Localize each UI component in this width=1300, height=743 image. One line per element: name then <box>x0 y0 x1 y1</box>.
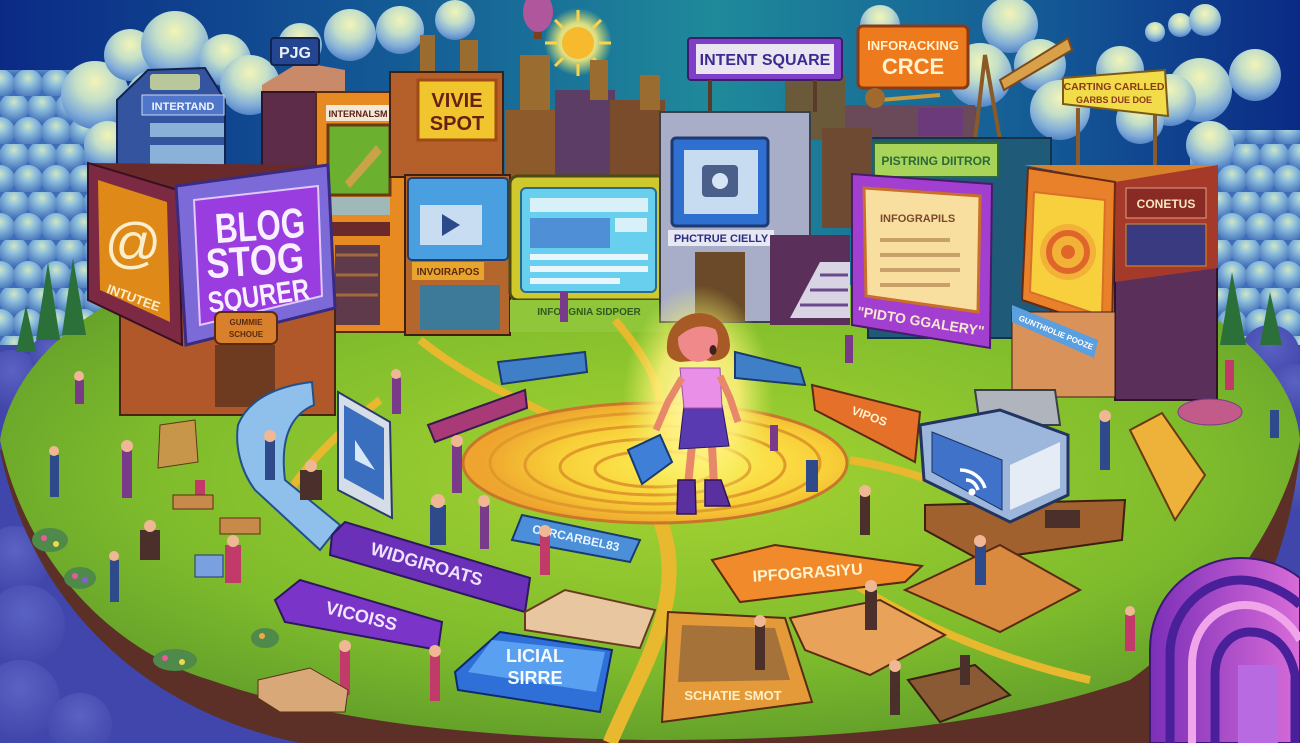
bench: Schatie Smot <box>662 612 812 722</box>
building: Conetus: GUNTHIOLIE POOZE <box>1017 314 1095 352</box>
bench: Licial Sirre <box>455 632 612 712</box>
storefront door: GUMMIE <box>230 318 263 327</box>
tag: PJG: PJG <box>279 45 311 62</box>
panel: at-sign orange face: INTUTEE <box>105 281 163 314</box>
icon: sun <box>544 8 612 76</box>
skyline of distant buildings <box>262 35 975 190</box>
sign: Carting Carlled <box>1063 70 1168 165</box>
sign: Carting Carlled: CARTING CARLLED <box>1064 81 1165 93</box>
bench: purple and red arc <box>428 390 527 442</box>
bench: blue top <box>498 352 587 384</box>
bench: Videos orange <box>812 385 920 462</box>
building: Internalsm: INTERNALSM <box>328 109 388 119</box>
sign: Inforacking Crce: INFORACKING <box>867 38 959 53</box>
flower patches <box>32 528 279 671</box>
lower haze <box>0 340 1300 743</box>
garden ring <box>1178 399 1242 425</box>
arms <box>656 376 738 430</box>
bench: Licial Sirre: SIRRE <box>507 668 563 688</box>
building: Blog Stog Squrer <box>88 163 335 415</box>
blue bag <box>628 435 672 484</box>
sign: Blog Stog Squrer: BLOG <box>213 199 307 252</box>
building: Infographics panel: INFOGRAPILS <box>880 213 955 225</box>
bench: Widgirorats: WIDGIROATS <box>368 539 485 590</box>
bench: Licial Sirre: LICIAL <box>506 646 564 666</box>
sign: Intent Square <box>688 38 842 112</box>
storefront door: SCHOUE <box>229 330 264 339</box>
sign: Vivie Spot <box>390 72 503 177</box>
character: girl <box>628 313 738 514</box>
building: video player screen: INVOIRAPOS <box>417 267 480 278</box>
building: Conetus: CONETUS <box>1137 197 1195 211</box>
sign: Blog Stog Squrer: STOG <box>204 234 306 287</box>
sign: white-blue arc screen <box>237 382 392 550</box>
table with laptop and picnic <box>158 420 348 712</box>
bench: Videos orange: VIPOS <box>850 403 889 429</box>
sign: Carting Carlled: GARBS DUE DOE <box>1076 95 1152 105</box>
shirt <box>680 368 722 408</box>
hot air balloon <box>523 0 553 39</box>
dress <box>679 405 729 449</box>
panel: at-sign orange face: @ <box>105 211 161 274</box>
floating island soil <box>0 450 1300 743</box>
building: Picture Cielly: PHCTRUE CIELLY <box>674 233 769 245</box>
labyrinth <box>463 403 847 523</box>
crane rooftop props <box>865 38 1072 140</box>
sign: Inforacking Crce: CRCE <box>882 54 944 79</box>
trees <box>16 258 1282 352</box>
bench: Vicoiss: VICOISS <box>324 598 399 635</box>
glow behind girl <box>623 285 773 515</box>
building: large web screen: INFORGNIA SIDPOER <box>537 307 642 318</box>
building: Intertand tower: INTERTAND <box>152 101 214 113</box>
sign: Blog Stog Squrer: SQURER <box>206 273 312 320</box>
building: Conetus <box>1012 165 1218 400</box>
bench: Schatie Smot: SCHATIE SMOT <box>684 688 782 703</box>
building: Intertand tower <box>117 68 225 172</box>
crowd of people <box>49 292 1279 715</box>
bench: Cyrcarbelas <box>512 515 640 562</box>
sign: Intent Square: INTENT SQUARE <box>700 52 831 69</box>
bench: Cyrcarbelas: CYRCARBEL83 <box>531 522 621 554</box>
sign: Vivie Spot: SPOT <box>430 113 484 135</box>
bench: Ipfograsiyu <box>712 545 922 602</box>
building: Picture Cielly <box>660 112 850 325</box>
building: large web screen <box>510 176 668 332</box>
bench: Widgirorats <box>330 522 530 612</box>
bench: blue right <box>735 352 805 385</box>
bench: pale sandbox <box>525 590 655 648</box>
building: Internalsm <box>262 92 406 332</box>
banner: Photo Gallery: "PIDTO GGALERY" <box>856 303 985 339</box>
sign: Vivie Spot: VIVIE <box>431 90 483 112</box>
purple arch corner <box>1150 558 1300 743</box>
building: Infographics panel <box>822 128 1051 348</box>
storefront door <box>215 312 277 407</box>
yellow paths <box>285 320 1090 743</box>
hair and head <box>667 313 730 362</box>
printer device with wifi <box>920 390 1125 560</box>
playground hut <box>1130 413 1205 520</box>
bench: orange right lower <box>790 600 945 675</box>
island grass <box>0 285 1300 740</box>
legs and boots <box>688 445 714 485</box>
bench: orange right upper <box>905 545 1080 632</box>
sign: Inforacking Crce <box>858 26 968 88</box>
building: video player screen <box>405 175 510 335</box>
bench: dark wood <box>908 665 1010 722</box>
panel: at-sign orange face <box>88 163 182 345</box>
tag: PJG <box>271 38 319 65</box>
sign: Blog Stog Squrer <box>176 165 335 345</box>
building: Infographics panel: PISTRING DIITROR <box>881 154 991 168</box>
bench: Vicoiss <box>275 580 442 650</box>
bench: Ipfograsiyu: IPFOGRASIYU <box>752 561 863 586</box>
